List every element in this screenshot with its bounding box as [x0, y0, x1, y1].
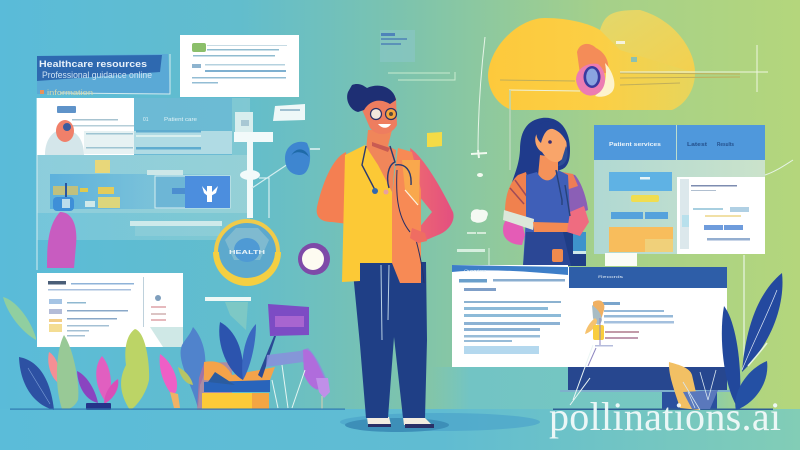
small white strip: [205, 297, 251, 301]
yellow blob with eye: [488, 10, 740, 110]
right plants: [669, 273, 783, 410]
doctor orange coat: [392, 148, 421, 283]
heading text: Healthcare resources: [39, 59, 147, 70]
doctor figure: [317, 84, 540, 432]
pot body: [204, 380, 270, 392]
eye pink body: [576, 64, 605, 96]
plant: orange flame leaf: [669, 362, 700, 410]
icon: purple ring: [298, 243, 330, 275]
woman pink arm: [503, 218, 525, 245]
woman face: [535, 127, 567, 162]
small note card: [273, 104, 305, 121]
woman forearm: [533, 222, 570, 232]
panel: right dashboard: [594, 125, 793, 266]
plant: tall navy leaf: [722, 306, 740, 408]
icon: small cloud note: [457, 209, 489, 265]
icon: yellow chat note: [427, 132, 442, 147]
panel header: [594, 125, 676, 160]
plant pot with flag: [197, 304, 330, 410]
eye white crescent: [595, 63, 614, 97]
right crosshair: [620, 45, 768, 92]
plant: navy leaves: [219, 322, 243, 380]
doctor neck and chest: [366, 130, 396, 195]
plant: vase: [683, 390, 718, 409]
doctor head: [360, 92, 397, 134]
woman sleeve right: [562, 172, 588, 217]
doctor yellow coat: [342, 145, 392, 282]
panel: central chart card: [50, 160, 230, 236]
doctor shadow: [340, 413, 540, 431]
white pointer line: [570, 345, 593, 405]
floor line: [10, 408, 345, 410]
doctor sleeve left: [317, 152, 352, 224]
doctor sleeve right: [410, 148, 454, 241]
eye orange petal: [577, 44, 608, 74]
left column widgets: [609, 172, 672, 191]
doctor hand: [410, 228, 427, 243]
panel: top faint note: [380, 30, 455, 80]
plant: magenta and purple: [96, 356, 111, 402]
doctor smile: [378, 124, 391, 128]
eye iris: [584, 66, 600, 88]
icon: pink figure with blue badge: [47, 183, 76, 268]
woman neck: [538, 155, 558, 188]
woman hair: [509, 118, 570, 194]
plant: coral leaf: [48, 352, 60, 384]
icon: medical cross post: [234, 112, 288, 218]
right white card: [677, 177, 765, 254]
plant: blue fern: [181, 327, 205, 408]
panel: title banner: [37, 54, 170, 97]
vertical stem: [743, 255, 745, 358]
gauge label: HEALTH: [229, 250, 266, 256]
doctor shoes: [367, 417, 391, 425]
watermark: pollinations.ai: pollinations.ai: [549, 394, 781, 439]
panel: title banner: information: [47, 90, 93, 97]
dashboard labels: 01: [143, 117, 149, 123]
document heading: Overview: [464, 269, 487, 273]
icon: small bird figure: [585, 300, 604, 366]
thin measuring line: [471, 37, 487, 177]
plant: pink leaf: [160, 354, 177, 395]
plant: sage leaf: [57, 335, 78, 409]
woman stethoscope: [556, 170, 570, 216]
panel: top document: [180, 35, 299, 97]
icon: purple flag: [258, 304, 309, 378]
doctor hair: [347, 84, 396, 112]
doctor stethoscope: [362, 146, 411, 190]
icon: white trident: [202, 186, 218, 202]
plant: navy leaf: [19, 357, 54, 410]
icon: blue shield: [285, 142, 320, 175]
panel: right dashboard: Latest: [687, 142, 707, 148]
ribbon shape: [266, 348, 328, 390]
left plants: [3, 297, 205, 410]
plant: dark pot: [86, 403, 111, 410]
woman apron: [523, 170, 572, 266]
doctor dark shadow: [345, 418, 449, 432]
panel: bottom left document: [37, 273, 183, 347]
woman sleeve left: [505, 172, 531, 225]
plant: big navy leaf: [742, 273, 783, 372]
icon: gold ring gauge: [213, 221, 281, 286]
panel: right dashboard: Patient services: [609, 142, 661, 148]
doctor trousers: [352, 262, 427, 418]
woman bandage: [503, 210, 534, 230]
monitor base: [553, 367, 773, 410]
doctor glasses: [370, 108, 382, 120]
panel: large translucent dashboard: [37, 98, 250, 270]
panel: lower right document: [568, 267, 727, 367]
woman figure: [503, 118, 589, 266]
panel: right dashboard: Results: [717, 142, 734, 148]
plant: lime leaf: [121, 329, 149, 410]
panel: profile card: [37, 98, 134, 155]
panel: lower left document: [452, 265, 568, 367]
panel: large translucent dashboard: Patient care: [164, 117, 197, 123]
connector line: [509, 90, 511, 170]
banner caption: [40, 90, 44, 94]
plant: pale green back leaf: [3, 297, 36, 340]
panel: title banner: Professional guidance online: [42, 70, 152, 80]
plant: lower navy leaf: [735, 361, 767, 410]
header label: Records: [598, 274, 623, 279]
